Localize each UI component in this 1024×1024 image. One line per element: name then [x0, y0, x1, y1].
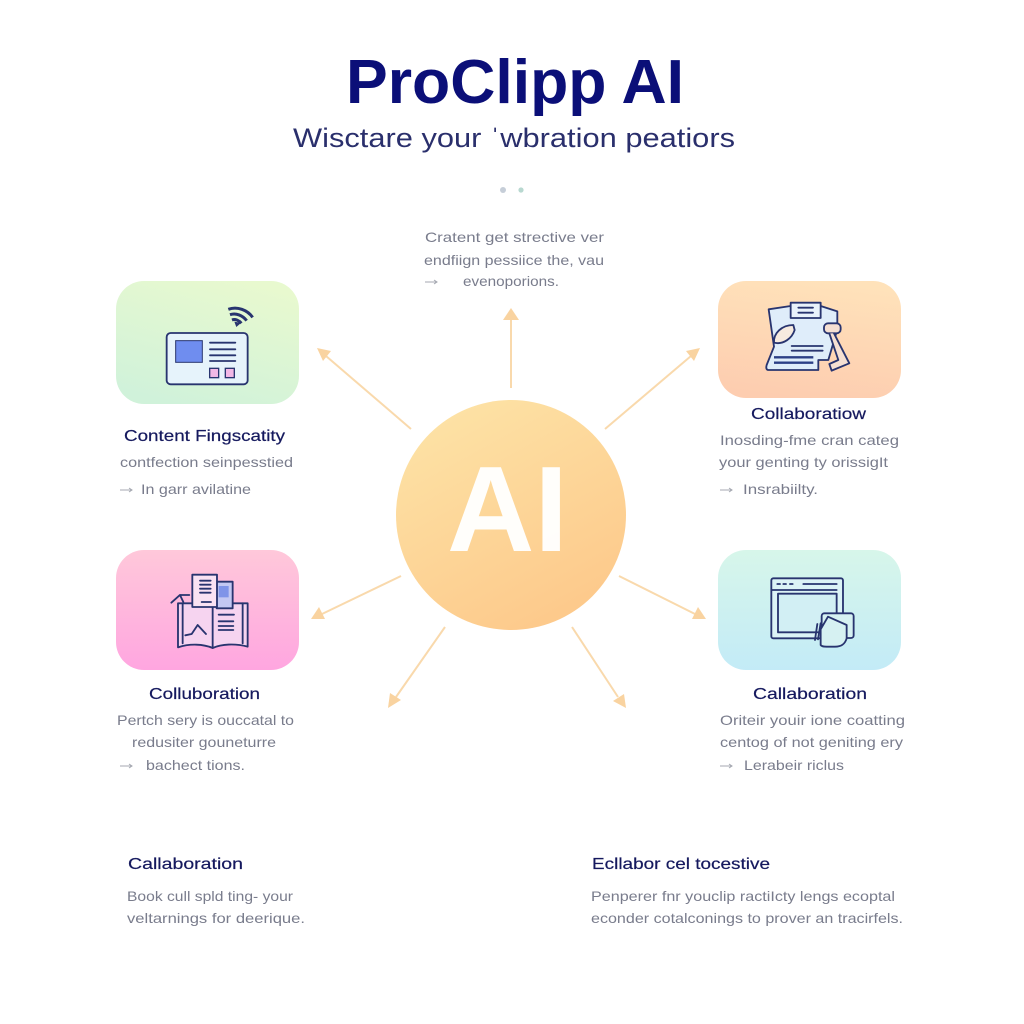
heading: Colluboration [149, 686, 260, 703]
arrow: upper right [605, 348, 700, 429]
text block: bottom right: econder cotalconings to prover an tracirfels. [591, 910, 903, 926]
description: Oriteir youir ione coatting [720, 712, 905, 728]
description: your genting ty orissigIt [719, 454, 888, 470]
description: Lerabeir riclus [744, 757, 844, 773]
heading: Content Fingscatity [124, 428, 285, 445]
text block: top centre: Cratent get strective ver [425, 229, 604, 245]
icon: clipboard with tools [766, 303, 849, 371]
icon: open book with documents [171, 575, 248, 648]
text block: bottom right: Ecllabor cel tocestive [592, 856, 770, 873]
icon: dashboard with wifi [167, 308, 253, 384]
description: bachect tions. [146, 757, 245, 773]
description: In garr avilatine [141, 481, 251, 497]
central AI circle [396, 400, 626, 630]
arrow: up [503, 308, 519, 388]
description: Insrabiilty. [743, 481, 818, 497]
text block: top centre: endfiign pessiice the, vau [424, 252, 604, 268]
card background blue [718, 550, 901, 670]
card background green [116, 281, 299, 404]
text block: bottom left: Book cull spld ting- your [127, 888, 293, 904]
heading: Collaboratiow [751, 406, 867, 423]
text block: bottom right: Penperer fnr youclip ractiIcty lengs ecoptal [591, 888, 895, 904]
description: redusiter gouneturre [132, 734, 276, 750]
card background orange [718, 281, 901, 398]
description: Inosding-fme cran categ [720, 432, 899, 448]
description [117, 712, 294, 773]
subtitle: Wisctare your ˈwbration peatiors [293, 123, 735, 153]
panel: content card top left [116, 281, 299, 497]
icon: browser window with hand [771, 578, 854, 647]
text block: top centre [424, 229, 604, 289]
heading: Callaboration [753, 686, 867, 703]
text block: bottom left [127, 856, 305, 926]
arrow: upper left [317, 348, 411, 429]
description [120, 454, 293, 497]
central AI circle: AI [447, 441, 568, 577]
description [720, 712, 905, 773]
arrow: lower right [572, 627, 626, 708]
text block: bottom right [591, 856, 903, 926]
text block: bottom left: veltarnings for deerique. [127, 910, 305, 926]
description [719, 432, 899, 497]
panel: collaboration card lower right [718, 550, 905, 773]
card background pink [116, 550, 299, 670]
panel: collaboration card top right [718, 281, 901, 497]
text block: top centre: evenoporions. [463, 273, 559, 289]
description: centog of not geniting ery [720, 734, 903, 750]
arrow: left [311, 576, 401, 619]
arrow: right [619, 576, 706, 619]
decorative dots [500, 187, 524, 193]
description: contfection seinpesstied [120, 454, 293, 470]
arrow: lower left [388, 627, 445, 708]
description: Pertch sery is ouccatal to [117, 712, 294, 728]
text block: bottom left: Callaboration [128, 856, 243, 873]
title: ProClipp AI [346, 48, 684, 117]
panel: collaboration card lower left [116, 550, 299, 773]
